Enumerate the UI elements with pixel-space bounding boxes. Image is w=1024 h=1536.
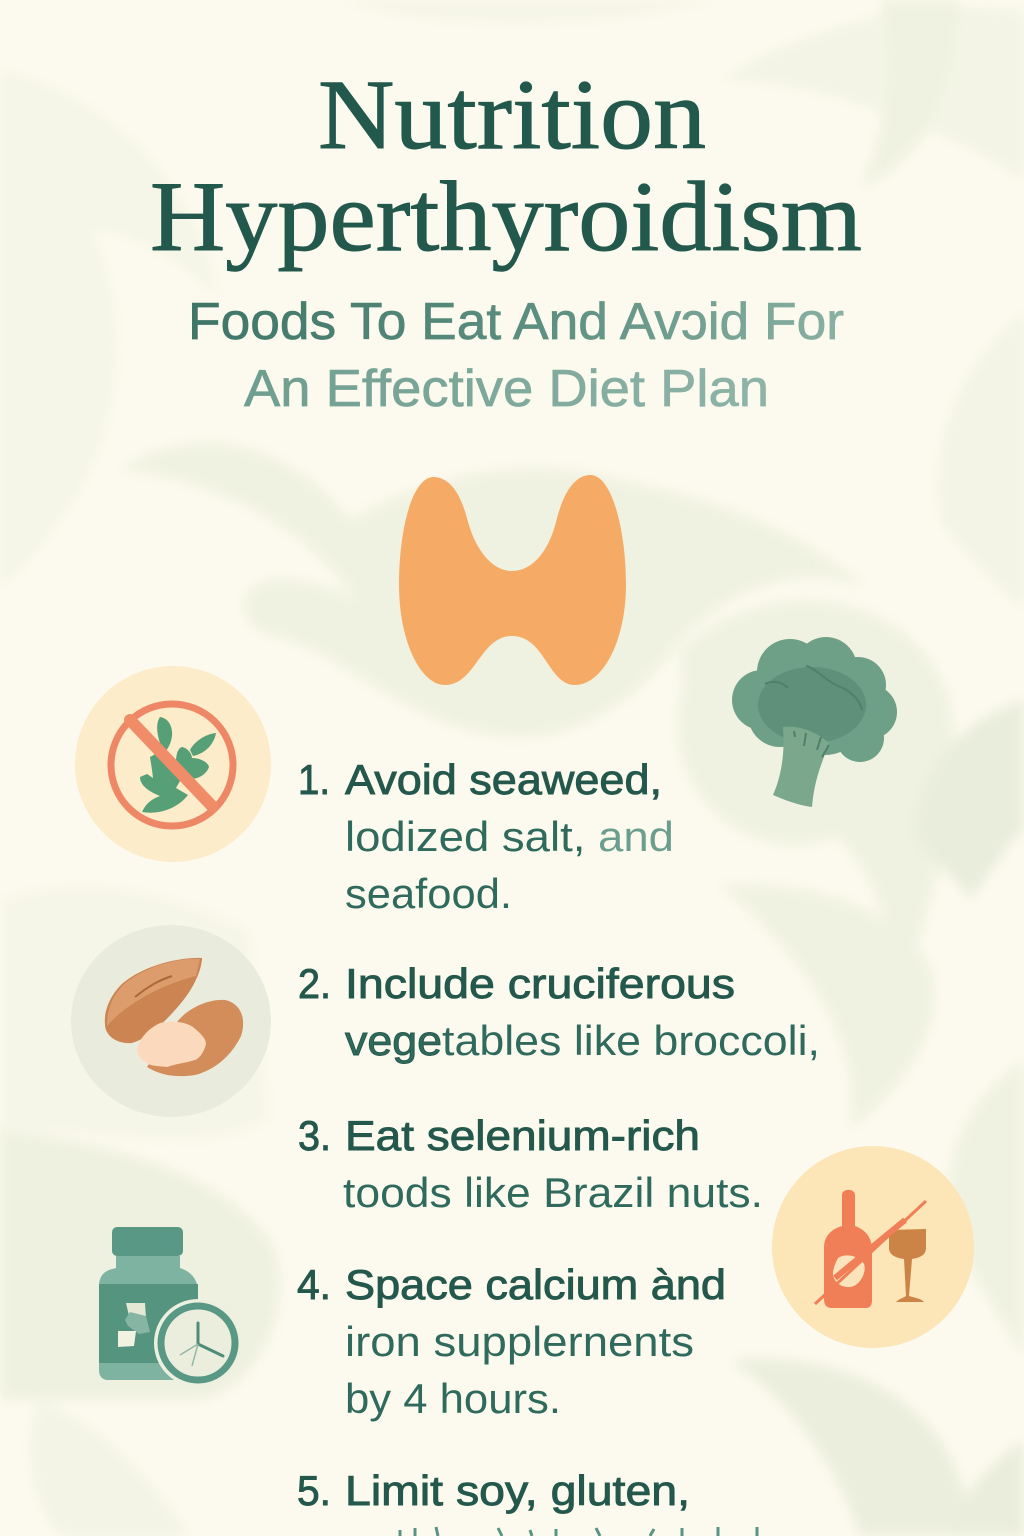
list item 5: soy and gluten: Limit soy, gluten, — [345, 1467, 690, 1514]
title: Nutrition — [318, 59, 706, 170]
title — [150, 59, 862, 272]
list item 2: cruciferous vegetables: vegetables like broccoli, — [345, 1017, 820, 1064]
subtitle: Foods To Eat And Avɔid For — [188, 293, 844, 351]
list item 1: seaweed — [298, 756, 674, 917]
icon: broccoli — [732, 637, 897, 807]
list item 2: cruciferous vegetables — [298, 960, 820, 1064]
list item 3: selenium: toods like Brazil nuts. — [343, 1169, 763, 1216]
list item 1: seaweed: lodized salt, and — [345, 813, 674, 860]
icon: no alcohol — [772, 1146, 974, 1348]
list item 1: seaweed: 1. — [298, 756, 330, 803]
list item 2: cruciferous vegetables: 2. — [298, 960, 331, 1007]
list item 3: selenium: Eat selenium-rich — [345, 1112, 700, 1159]
list item 2: cruciferous vegetables: Include cruciferous — [345, 960, 735, 1007]
subtitle: An Effective Diet Plan — [244, 360, 769, 418]
icon: supplement bottle and clock — [99, 1227, 242, 1387]
icon: selenium nuts — [71, 925, 271, 1117]
icon: no seaweed — [75, 666, 271, 862]
list item 4: calcium and iron: iron supplernents — [345, 1318, 694, 1365]
list item 4: calcium and iron: 4. — [297, 1261, 331, 1308]
list item 4: calcium and iron: Space calcium ànd — [345, 1261, 726, 1308]
list item 3: selenium: 3. — [298, 1112, 331, 1159]
list item 5: soy and gluten — [297, 1467, 757, 1536]
title: Hyperthyroidism — [150, 161, 862, 272]
subtitle — [188, 293, 844, 418]
list item 4: calcium and iron: by 4 hours. — [345, 1375, 561, 1422]
list item 1: seaweed: Avoid seaweed, — [345, 756, 662, 803]
list item 4: calcium and iron — [297, 1261, 726, 1422]
list item 5: soy and gluten: 5. — [297, 1467, 331, 1514]
list item 1: seaweed: seafood. — [345, 870, 512, 917]
list item 3: selenium — [298, 1112, 763, 1216]
icon: thyroid gland — [399, 475, 626, 685]
